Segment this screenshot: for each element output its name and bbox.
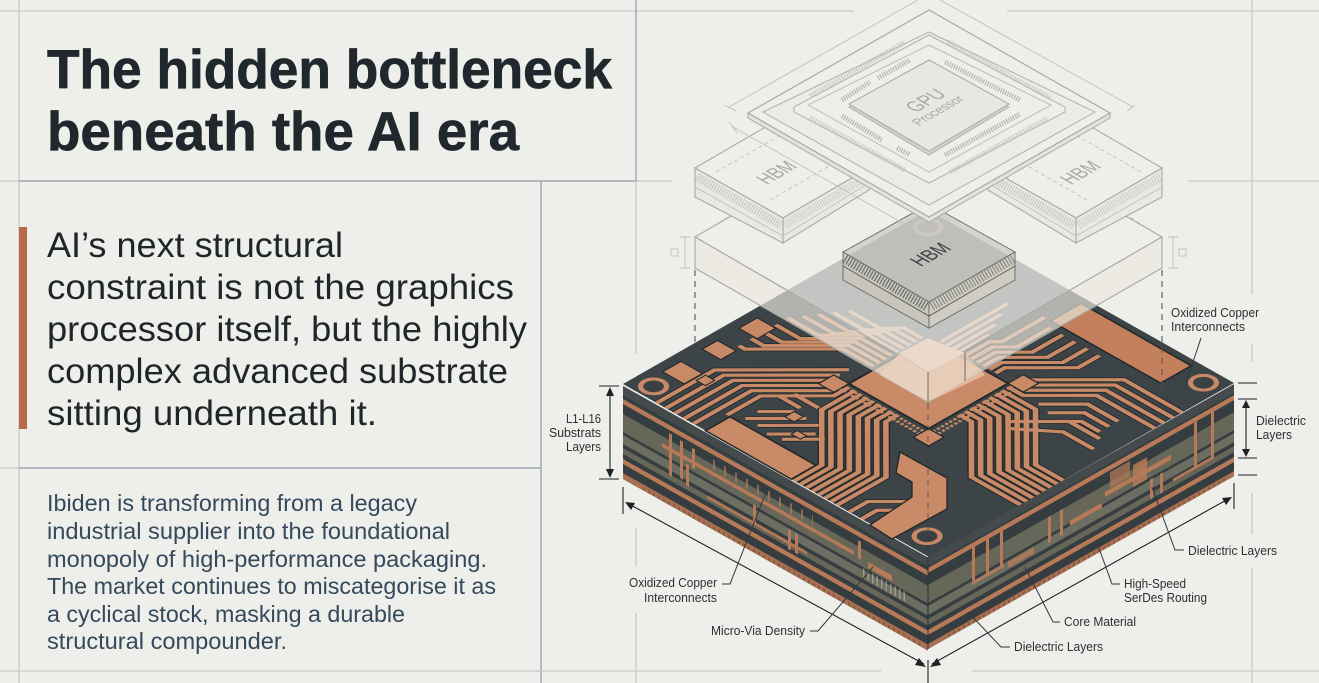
copper pad: right bbox=[1051, 303, 1191, 383]
callout: Core Material: Core Material bbox=[1064, 614, 1136, 629]
label: Dielectric Layers right: Layers bbox=[1256, 427, 1292, 442]
label: L1-L16 Substrats Layers: Substrats bbox=[549, 425, 601, 440]
lead statement: processor itself, but the highly bbox=[47, 310, 528, 349]
central copper die pad bbox=[849, 338, 1008, 429]
callout: Micro-Via Density: Micro-Via Density bbox=[711, 623, 805, 638]
label: HBM right: HBM bbox=[1055, 158, 1107, 187]
callout: High-Speed SerDes Routing: SerDes Routing bbox=[1124, 590, 1207, 605]
label: Processor: Processor bbox=[908, 93, 968, 127]
GPU processor bbox=[748, 10, 1110, 222]
mounting rings bbox=[633, 217, 1222, 551]
right wall layers bbox=[928, 384, 1234, 649]
translucent interposer plate bbox=[695, 102, 1162, 402]
right HBM module bbox=[988, 118, 1162, 243]
callout: Oxidized Copper Interconnects left: Interconnects bbox=[644, 590, 717, 605]
board top face with traces bbox=[623, 210, 1234, 557]
accent bar bbox=[19, 227, 27, 429]
callout: Dielectric Layers bottom: Dielectric Layers bbox=[1014, 639, 1103, 654]
substrate board bbox=[623, 210, 1234, 651]
left HBM module bbox=[695, 118, 869, 243]
title: The hidden bottleneck bbox=[47, 38, 612, 100]
dimension lines: GPU and plate bbox=[671, 0, 1186, 392]
body text: Ibiden is transforming from a legacy bbox=[47, 490, 418, 516]
callout: Dielectric Layers lower right bbox=[1152, 487, 1277, 558]
label: Dielectric Layers right bbox=[1256, 413, 1306, 442]
callout: Oxidized Copper Interconnects top right bbox=[1171, 305, 1260, 386]
lead statement: AI’s next structural bbox=[47, 226, 343, 265]
body text: The market continues to miscategorise it as bbox=[47, 573, 496, 599]
body text: structural compounder. bbox=[47, 628, 287, 654]
label: L1-L16 Substrats Layers: Layers bbox=[566, 439, 601, 454]
callout: Oxidized Copper Interconnects top right: Oxidized Copper bbox=[1171, 305, 1260, 320]
lead statement: sitting underneath it. bbox=[47, 394, 377, 433]
callout: High-Speed SerDes Routing bbox=[1096, 540, 1207, 605]
body text: a cyclical stock, masking a durable bbox=[47, 601, 405, 627]
lead statement: constraint is not the graphics bbox=[47, 268, 514, 307]
callout: Oxidized Copper Interconnects top right: Interconnects bbox=[1171, 319, 1245, 334]
lead statement bbox=[47, 226, 528, 433]
callout: Dielectric Layers lower right: Dielectric Layers bbox=[1188, 543, 1277, 558]
dimension: L1-L16 height bbox=[599, 386, 619, 479]
label: Dielectric Layers right: Dielectric bbox=[1256, 413, 1306, 428]
lead statement: complex advanced substrate bbox=[47, 352, 508, 391]
callout: Micro-Via Density bbox=[711, 567, 873, 638]
title bbox=[47, 38, 612, 162]
body text: monopoly of high-performance packaging. bbox=[47, 546, 487, 572]
via rows around die bbox=[831, 328, 1026, 439]
callout: Oxidized Copper Interconnects left bbox=[629, 487, 768, 605]
dimension arrows: base width and depth bbox=[623, 483, 1234, 683]
left wall layers bbox=[623, 386, 928, 651]
label: HBM center: HBM bbox=[905, 240, 957, 269]
callout: High-Speed SerDes Routing: High-Speed bbox=[1124, 576, 1186, 591]
title: beneath the AI era bbox=[47, 100, 519, 162]
light cube bbox=[880, 338, 985, 402]
body text bbox=[47, 490, 496, 654]
body text: industrial supplier into the foundational bbox=[47, 518, 450, 544]
center HBM stack bbox=[843, 204, 1015, 328]
copper pad: Z shape bbox=[870, 452, 947, 539]
copper pad: front left bbox=[706, 417, 816, 479]
dimension line: HBM bbox=[729, 122, 922, 231]
callout: Oxidized Copper Interconnects left: Oxidized Copper bbox=[629, 575, 718, 590]
callout: Core Material bbox=[1025, 567, 1136, 629]
dimension: Dielectric layers height bbox=[1238, 383, 1257, 475]
callout: Dielectric Layers bottom bbox=[968, 612, 1103, 654]
label: L1-L16 Substrats Layers: L1-L16 bbox=[566, 411, 601, 426]
label: L1-L16 Substrats Layers bbox=[549, 411, 601, 454]
label: GPU: GPU bbox=[900, 86, 952, 115]
label: HBM left: HBM bbox=[751, 158, 803, 187]
